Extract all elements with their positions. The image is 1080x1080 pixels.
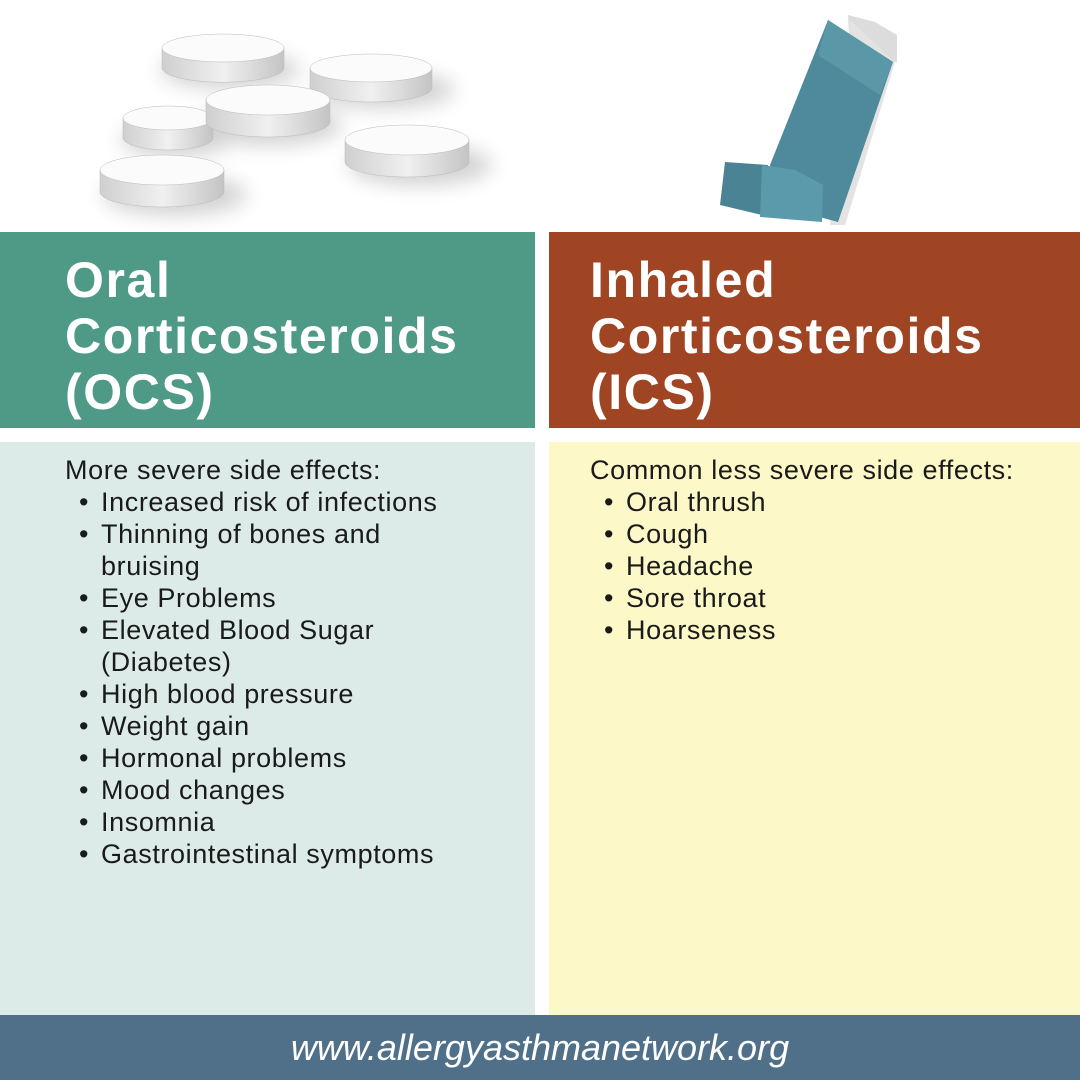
list: OCS side effects: •	[79, 615, 89, 645]
list: OCS side effects: •	[79, 711, 89, 741]
list: OCS side effects: •	[79, 487, 89, 517]
list: OCS side effects: Hormonal problems	[101, 743, 347, 773]
list: ICS side effects	[604, 487, 776, 645]
list: OCS side effects: (Diabetes)	[101, 647, 232, 677]
list: ICS side effects: Sore throat	[626, 583, 766, 613]
list: OCS side effects: Increased risk of infections	[101, 487, 437, 517]
footer: website	[0, 1015, 1080, 1080]
text: ICS intro: Common less severe side effects:	[590, 455, 1014, 485]
text: OCS intro: More severe side effects:	[65, 455, 381, 485]
panel header: OCS: (OCS)	[65, 364, 215, 420]
list: OCS side effects: •	[79, 583, 89, 613]
illustration: pills	[100, 34, 496, 224]
list: ICS side effects: •	[604, 615, 614, 645]
list: OCS side effects: •	[79, 679, 89, 709]
list: OCS side effects: Thinning of bones and	[101, 519, 381, 549]
panel header: ICS: (ICS)	[590, 364, 715, 420]
list: ICS side effects: •	[604, 487, 614, 517]
list: ICS side effects: •	[604, 583, 614, 613]
list: OCS side effects: •	[79, 519, 89, 549]
list: OCS side effects: High blood pressure	[101, 679, 354, 709]
list: ICS side effects: Oral thrush	[626, 487, 766, 517]
illustration: inhaler	[720, 15, 897, 225]
list: ICS side effects: Headache	[626, 551, 754, 581]
list: OCS side effects: Mood changes	[101, 775, 285, 805]
panel header: ICS	[549, 232, 1080, 428]
list: OCS side effects: Elevated Blood Sugar	[101, 615, 374, 645]
panel header: OCS	[0, 232, 535, 428]
list: OCS side effects	[79, 487, 437, 869]
list: ICS side effects: Hoarseness	[626, 615, 776, 645]
panel header: OCS: Oral	[65, 252, 171, 308]
list: OCS side effects: Gastrointestinal symptoms	[101, 839, 434, 869]
panel body: ICS side effects	[549, 442, 1080, 1015]
list: OCS side effects: Weight gain	[101, 711, 250, 741]
list: OCS side effects: •	[79, 775, 89, 805]
panel header: ICS: Inhaled	[590, 252, 776, 308]
list: OCS side effects: •	[79, 743, 89, 773]
list: ICS side effects: •	[604, 551, 614, 581]
list: OCS side effects: Eye Problems	[101, 583, 276, 613]
list: ICS side effects: •	[604, 519, 614, 549]
list: OCS side effects: Insomnia	[101, 807, 215, 837]
panel header: OCS: Corticosteroids	[65, 308, 459, 364]
panel header: ICS: Corticosteroids	[590, 308, 984, 364]
panel body: OCS side effects	[0, 442, 535, 1015]
list: OCS side effects: bruising	[101, 551, 200, 581]
list: ICS side effects: Cough	[626, 519, 709, 549]
footer: website: www.allergyasthmanetwork.org	[291, 1027, 789, 1068]
list: OCS side effects: •	[79, 807, 89, 837]
list: OCS side effects: •	[79, 839, 89, 869]
